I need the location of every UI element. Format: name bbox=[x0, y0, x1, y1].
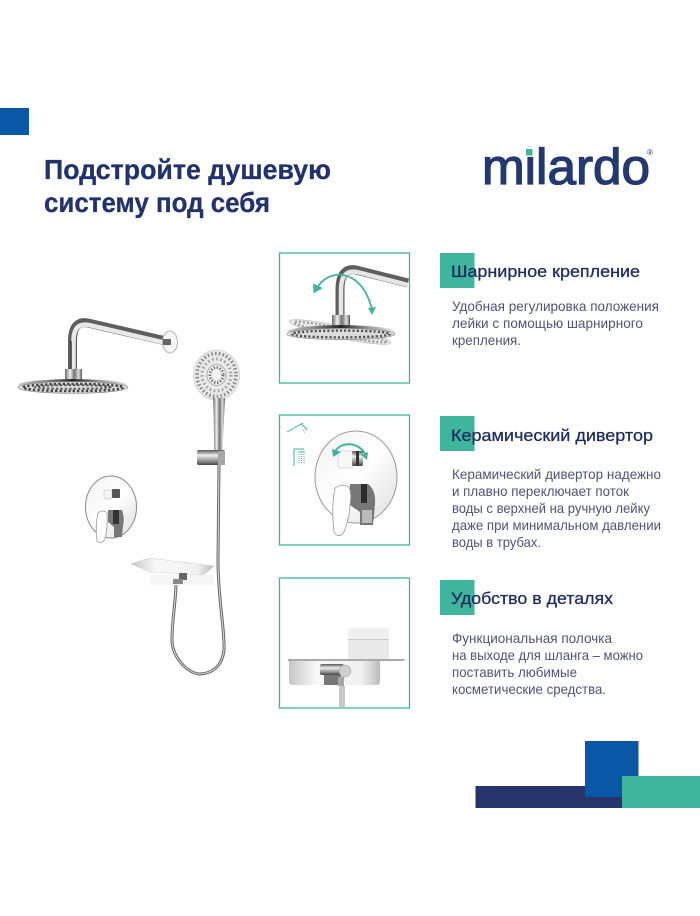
text 2: воды в трубах. bbox=[452, 534, 541, 550]
decorative blocks bbox=[476, 741, 700, 808]
title: систему под себя bbox=[44, 187, 270, 218]
text 3 bbox=[452, 630, 643, 697]
text 2: Керамический дивертор надежно bbox=[452, 466, 661, 482]
arrow: rotation bbox=[312, 275, 376, 315]
text 2: и плавно переключает поток bbox=[452, 483, 630, 499]
jar bbox=[348, 628, 389, 659]
arm and head bbox=[287, 270, 408, 340]
logo: milardo: ® bbox=[647, 148, 653, 157]
text 1 bbox=[452, 298, 659, 348]
logo: milardo: milardo bbox=[482, 139, 650, 195]
corner square bbox=[0, 108, 29, 135]
icon: hand shower bbox=[294, 449, 305, 466]
hose highlight bbox=[172, 465, 224, 674]
arrow: knob rotation bbox=[332, 444, 368, 460]
hose bbox=[172, 465, 224, 674]
text 2: воды с верхней на ручную лейку bbox=[452, 500, 650, 516]
lever and body bbox=[333, 484, 375, 536]
shelf with connector bbox=[131, 558, 214, 585]
heading 1: Шарнирное крепление bbox=[451, 262, 640, 281]
text 1: Удобная регулировка положения bbox=[452, 298, 659, 314]
heading 2: Керамический дивертор bbox=[451, 426, 653, 445]
frame 1: swivel joint bbox=[280, 253, 410, 383]
shelf bbox=[288, 659, 406, 685]
overhead shower bbox=[18, 323, 178, 393]
frame 3: shelf detail bbox=[280, 578, 410, 708]
diverter knob bbox=[338, 451, 363, 468]
teal tab 3 bbox=[440, 580, 474, 615]
text 3: косметические средства. bbox=[452, 681, 606, 697]
teal tab 1 bbox=[440, 253, 474, 288]
text 3: поставить любимые bbox=[452, 664, 577, 680]
text 2 bbox=[452, 466, 661, 550]
icon: overhead shower bbox=[287, 423, 308, 433]
text 1: лейки с помощью шарнирного bbox=[452, 315, 643, 331]
hand shower bbox=[194, 350, 240, 465]
mixer plate bbox=[315, 431, 397, 523]
text 2: даже при минимальном давлении bbox=[452, 517, 661, 533]
teal tab 2 bbox=[440, 416, 474, 451]
hose connector bbox=[320, 664, 351, 707]
text 3: Функциональная полочка bbox=[452, 630, 612, 646]
product: full shower system bbox=[18, 323, 240, 674]
frame 2: diverter bbox=[280, 415, 410, 545]
title bbox=[44, 154, 331, 218]
text 1: крепления. bbox=[452, 332, 521, 348]
wall mixer bbox=[86, 476, 136, 543]
text 3: на выходе для шланга – можно bbox=[452, 647, 643, 663]
tilted ghost head bbox=[288, 315, 392, 349]
title: Подстройте душевую bbox=[44, 154, 331, 185]
heading 3: Удобство в деталях bbox=[451, 589, 614, 608]
